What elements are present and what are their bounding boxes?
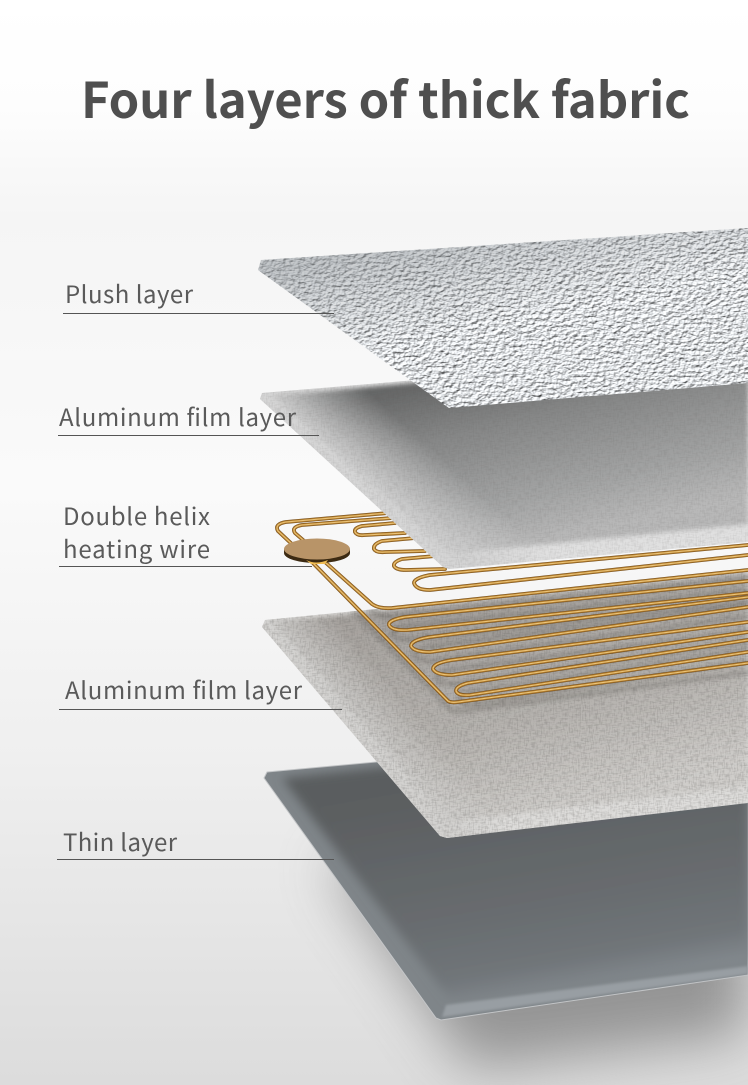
layer: lower aluminum film slab <box>255 565 748 845</box>
label: plush layer: Plush layer <box>65 275 194 310</box>
layer: upper aluminum film slab <box>260 380 748 569</box>
bottom layer ground shadow <box>325 860 748 1068</box>
label: thin layer: Thin layer <box>63 823 178 858</box>
layer: thin layer slab <box>264 762 748 1020</box>
label: double helix heating wire <box>59 497 312 567</box>
heating wire shadow on lower layer <box>350 576 748 715</box>
layer: plush slab <box>258 228 748 408</box>
double helix heating wire <box>277 513 748 702</box>
label: aluminum film layer lower: Aluminum film layer <box>65 671 303 706</box>
label: double helix heating wire: Double helix <box>63 497 210 532</box>
label: aluminum film layer upper: Aluminum film layer <box>59 398 297 433</box>
label: double helix heating wire: heating wire <box>63 530 210 565</box>
title: Four layers of thick fabric <box>81 62 690 133</box>
icon: round connector disc <box>284 538 350 564</box>
